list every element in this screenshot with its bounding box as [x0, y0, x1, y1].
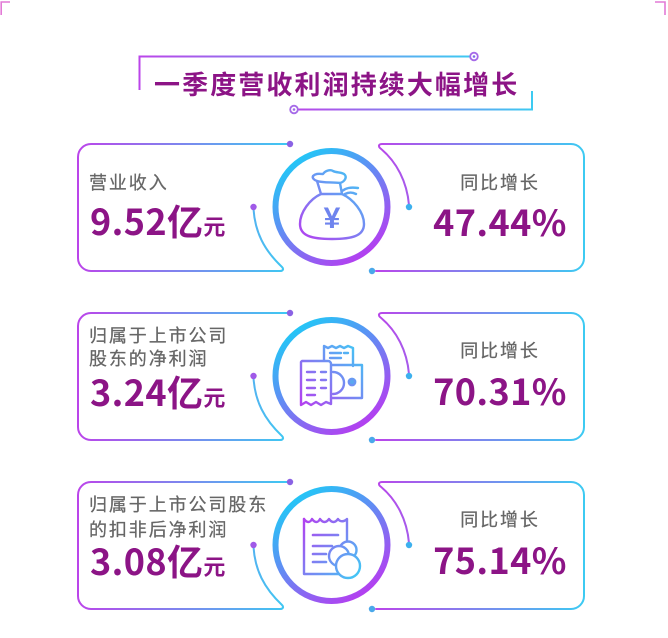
label: 归属于上市公司 [89, 322, 228, 348]
corner mark: top left [1, 2, 10, 15]
label: 归属于上市公司股东 [89, 491, 268, 517]
label: 同比增长 [460, 337, 540, 363]
right card frame [369, 313, 584, 443]
row 2: net profit [78, 310, 584, 443]
value: 3.08亿元 [90, 534, 225, 586]
row 3: net profit excluding non-recurring items [78, 479, 584, 612]
left card frame [78, 141, 293, 271]
icon: money bag [300, 170, 364, 239]
label: 同比增长 [460, 169, 540, 195]
value: 75.14% [433, 533, 567, 585]
title: 一季度营收利润持续大幅增长 [154, 65, 519, 102]
icon: receipts and banknote [301, 346, 362, 405]
label: 营业收入 [89, 169, 169, 195]
value: 9.52亿元 [90, 194, 225, 246]
title frame: upper dot [470, 53, 478, 60]
title block [140, 53, 532, 113]
right card frame [369, 482, 584, 612]
icon: yen sign: ¥ [324, 202, 341, 235]
label line 2: 的扣非后净利润 [89, 516, 228, 542]
icon ring [276, 320, 388, 432]
label line 2: 股东的净利润 [89, 345, 208, 371]
label: 同比增长 [460, 506, 540, 532]
title frame: lower dot [290, 106, 298, 113]
icon ring [276, 489, 388, 601]
value: 3.24亿元 [90, 365, 225, 417]
row 1: revenue [78, 141, 584, 274]
corner mark: top right [655, 2, 665, 15]
title frame: lower right bracket [298, 91, 532, 110]
value: 47.44% [433, 195, 567, 247]
icon: receipt with coins [304, 519, 360, 578]
value: 70.31% [433, 364, 567, 416]
left card frame [78, 479, 293, 609]
left card frame [78, 310, 293, 440]
icon ring [276, 151, 388, 263]
right card frame [369, 144, 584, 274]
title frame: upper left bracket [140, 56, 470, 90]
